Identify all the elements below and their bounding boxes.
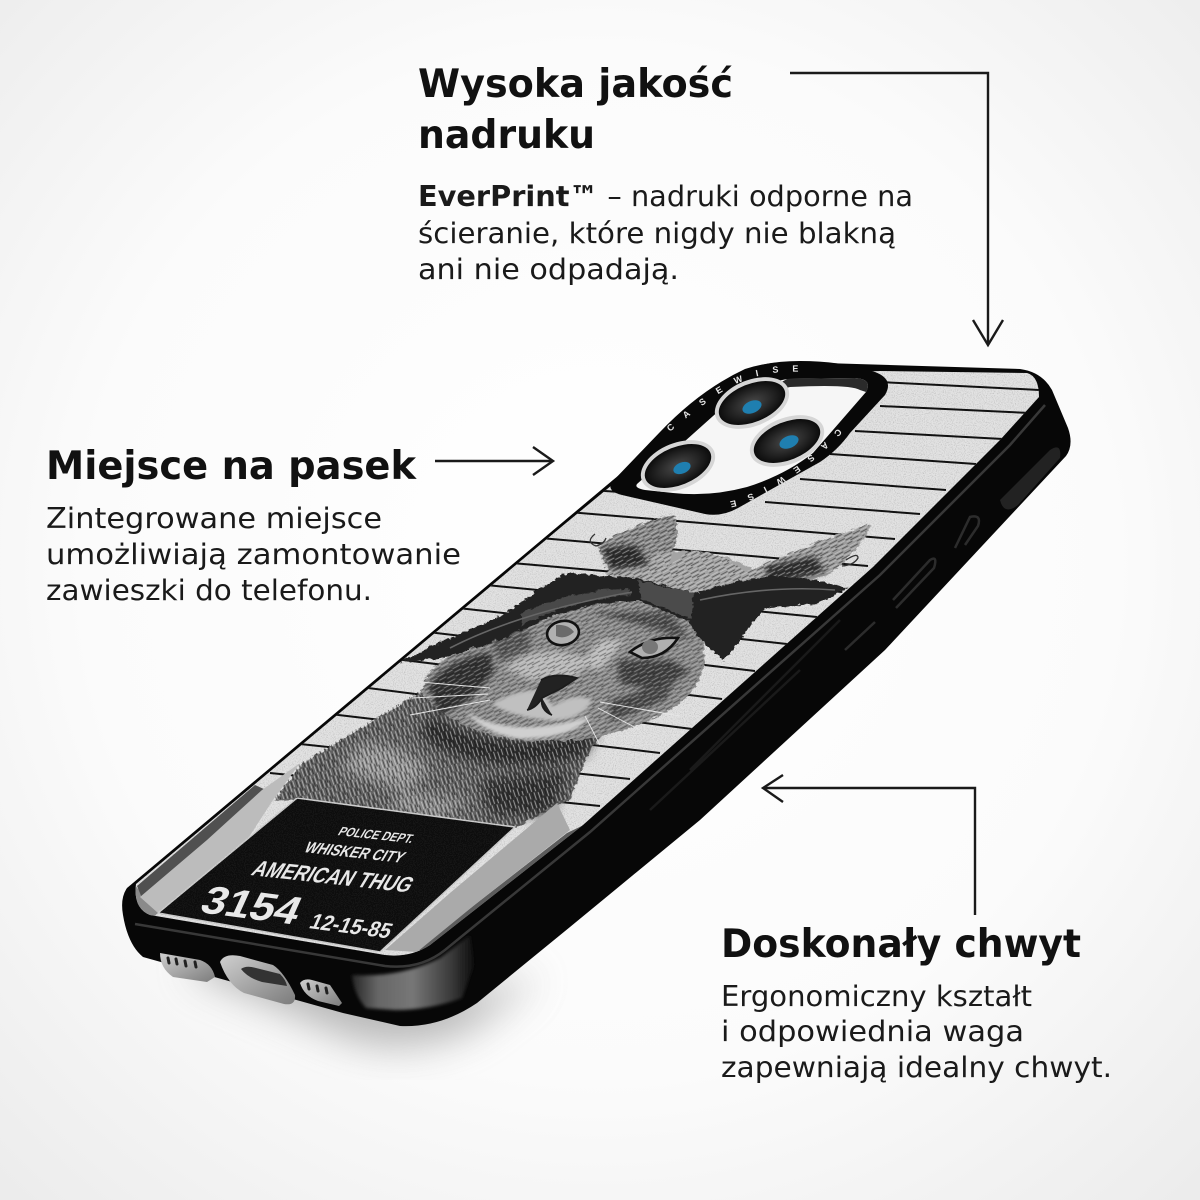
mugshot sign: WHISKER CITY xyxy=(301,839,409,866)
sign text: POLICE DEPT. xyxy=(335,824,418,846)
body text: Ergonomiczny kształt xyxy=(721,980,1032,1013)
left speaker grille xyxy=(160,953,215,982)
mugshot sign: 12-15-85 xyxy=(306,909,397,943)
face hatching xyxy=(420,598,704,741)
body text: zapewniają idealny chwyt. xyxy=(721,1051,1112,1084)
body text xyxy=(418,180,913,286)
lens right xyxy=(742,405,832,477)
body fur shading xyxy=(340,715,598,820)
earrings xyxy=(590,534,858,566)
jacket lapel right xyxy=(385,803,570,952)
lens left xyxy=(633,430,723,502)
ring lettering top: CASEWISE xyxy=(667,365,798,430)
body text: ścieranie, które nigdy nie blakną xyxy=(418,217,896,250)
right eye xyxy=(630,638,678,658)
heading: Doskonały chwyt xyxy=(721,922,1081,967)
face markings xyxy=(428,612,690,722)
chin ring xyxy=(466,712,590,739)
camera ring xyxy=(610,361,888,515)
cat body xyxy=(273,688,602,827)
lens top xyxy=(707,367,797,439)
bandana highlight folds xyxy=(450,589,835,648)
ear base shading xyxy=(602,545,825,585)
body text: umożliwiają zamontowanie xyxy=(46,538,461,571)
ears and forehead xyxy=(597,513,870,600)
body text: ani nie odpadają. xyxy=(418,253,679,286)
left eye xyxy=(545,618,581,648)
jacket lapel left xyxy=(140,763,300,913)
cat illustration xyxy=(132,513,870,952)
plateau shading xyxy=(760,378,868,394)
body text: zawieszki do telefonu. xyxy=(46,574,372,607)
shirt hem corner xyxy=(136,886,158,916)
body text xyxy=(46,502,461,607)
arrow right to camera xyxy=(435,447,553,475)
callout: print quality xyxy=(418,62,1003,345)
ring lettering bottom: CASEWISE xyxy=(730,430,842,508)
arrow down to case xyxy=(790,73,1003,345)
right ear xyxy=(746,524,872,581)
rim highlight xyxy=(135,405,1045,967)
body text: i odpowiednia waga xyxy=(721,1015,1024,1048)
side details: buttons and strap slot xyxy=(650,447,1060,810)
right speaker grille xyxy=(300,979,342,1006)
phone drop shadow xyxy=(190,935,540,1046)
bandana xyxy=(397,572,847,662)
whiskers xyxy=(410,682,680,745)
body text: EverPrint™ – nadruki odporne na xyxy=(418,180,913,213)
camera plateau xyxy=(636,378,868,494)
mugshot sign: 3154 xyxy=(194,879,310,933)
body text: Zintegrowane miejsce xyxy=(46,502,382,535)
height chart stripes xyxy=(270,382,1040,806)
bottom corner gloss xyxy=(352,935,474,1010)
paper background xyxy=(120,360,1050,970)
phone case xyxy=(122,362,1071,1026)
heading xyxy=(418,62,733,158)
body fur hatching xyxy=(273,688,602,827)
mugshot sign xyxy=(158,798,515,952)
body text xyxy=(721,980,1112,1084)
muzzle xyxy=(492,690,592,720)
mugshot sign: AMERICAN THUG xyxy=(247,856,420,897)
camera island xyxy=(610,361,888,515)
printed back panel: mugshot artwork xyxy=(120,360,1050,970)
charging port xyxy=(220,955,295,1004)
heading: Miejsce na pasek xyxy=(46,444,417,489)
heading: Wysoka jakość xyxy=(418,62,733,107)
left ear xyxy=(597,513,676,574)
callout: strap slot xyxy=(46,444,553,607)
nose and mouth xyxy=(527,675,577,715)
dark shirt band left xyxy=(137,785,266,898)
case silhouette xyxy=(122,362,1071,1026)
arrow left to side of case xyxy=(763,775,975,915)
callout: grip xyxy=(721,775,1112,1084)
heading: nadruku xyxy=(418,113,595,158)
ear hatching xyxy=(597,513,870,600)
forehead fur xyxy=(605,550,753,594)
jacket right shadow xyxy=(417,822,590,950)
cat head xyxy=(420,598,704,741)
